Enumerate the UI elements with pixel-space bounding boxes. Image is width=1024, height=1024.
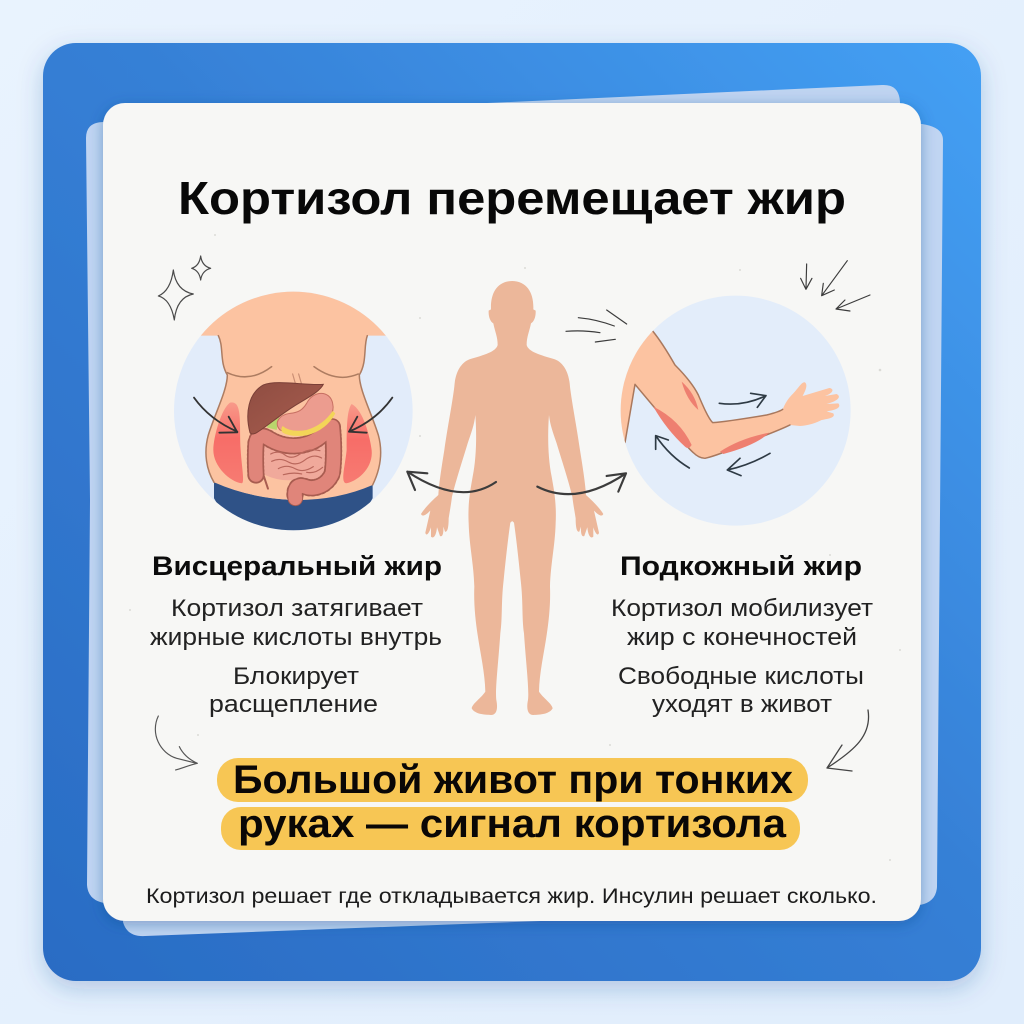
text block: visceral fat: Висцеральный жир: [152, 551, 442, 581]
arm arrows: [656, 393, 770, 476]
gallbladder: [267, 417, 279, 430]
callout: highlighted conclusion: [217, 758, 808, 850]
arrow: right swoosh to callout: [827, 710, 869, 771]
motion lines: [566, 261, 870, 342]
fat right: [343, 404, 372, 483]
footer note: Кортизол решает где откладывается жир. Инсулин решает сколько.: [146, 885, 877, 908]
bowel folds: [271, 450, 323, 475]
fat patches: [653, 382, 769, 454]
colon: [255, 427, 334, 498]
callout: highlighted conclusion: Большой живот при тонких: [233, 758, 793, 802]
liver: [248, 383, 323, 434]
arm skin: [620, 332, 840, 458]
text block: visceral fat: [150, 551, 442, 718]
rotated back sheet: [123, 85, 905, 936]
title: Кортизол перемещает жир: [178, 172, 846, 224]
small intestine: [264, 444, 325, 480]
text block: subcutaneous fat: Свободные кислоты: [618, 663, 864, 690]
fat left: [213, 402, 243, 483]
paper specks: [129, 234, 901, 861]
paper card: [103, 103, 921, 921]
illustration: arm subcutaneous fat: [566, 261, 870, 526]
text block: visceral fat: Кортизол затягивает: [171, 595, 423, 622]
second back sheet: [86, 122, 943, 905]
text block: subcutaneous fat: Кортизол мобилизует: [611, 595, 873, 622]
arrow: body to left circle: [407, 472, 496, 492]
text block: subcutaneous fat: Подкожный жир: [620, 551, 862, 581]
text block: visceral fat: расщепление: [209, 691, 378, 718]
pancreas: [281, 411, 335, 436]
human body silhouette: [421, 281, 603, 715]
stomach: [277, 393, 333, 432]
torso outlines: [206, 336, 381, 485]
text block: subcutaneous fat: жир с конечностей: [627, 624, 857, 651]
text block: subcutaneous fat: уходят в живот: [652, 691, 832, 718]
arrow: left swoosh to callout: [155, 716, 197, 770]
arrows into fat: [194, 398, 392, 433]
callout: highlighted conclusion: руках — сигнал кортизола: [238, 802, 787, 846]
torso skin: [200, 292, 386, 500]
text block: visceral fat: Блокирует: [233, 663, 359, 690]
text block: visceral fat: жирные кислоты внутрь: [150, 624, 442, 651]
waistband: [214, 482, 373, 530]
arrow: body to right circle: [537, 473, 626, 494]
arm outlines: [625, 331, 790, 458]
icon: sparkles: [158, 256, 211, 320]
illustration: visceral fat torso: [174, 292, 412, 530]
text block: subcutaneous fat: [611, 551, 873, 718]
